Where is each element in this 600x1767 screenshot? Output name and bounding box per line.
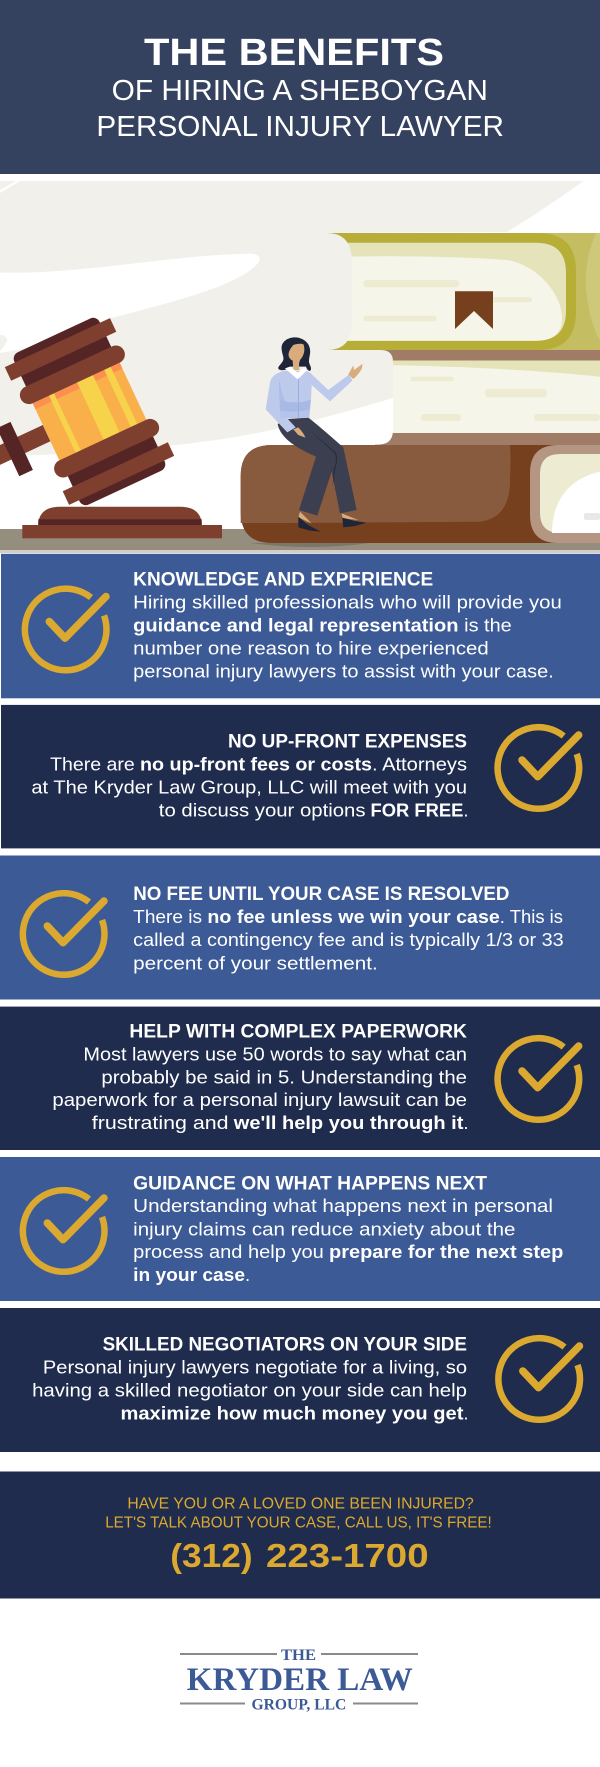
icon: bottom book (241, 445, 600, 547)
body text: personal injury lawyers to assist with your case. (133, 661, 554, 682)
body text: process and help you (133, 1241, 324, 1262)
body text: Personal injury lawyers negotiate for a living, so (43, 1356, 467, 1378)
logo: The Kryder Law Group: KRYDER LAW (187, 1662, 413, 1698)
body text: . (463, 799, 469, 820)
call to action panel (0, 1472, 600, 1598)
body text: in your case (133, 1264, 245, 1285)
body text: prepare for the next step (329, 1241, 563, 1262)
panel: knowledge and experience (1, 554, 600, 698)
body text: . (463, 1112, 469, 1133)
callout text line two: LET'S TALK ABOUT YOUR CASE, CALL US, IT'S FREE! (105, 1514, 492, 1531)
icon: gavel head and handle (0, 311, 178, 547)
panel: help with complex paperwork (0, 1007, 600, 1150)
heading: GUIDANCE ON WHAT HAPPENS NEXT (133, 1173, 487, 1194)
body text: no up-front fees or costs (140, 754, 372, 774)
icon: seated woman (266, 337, 367, 532)
body text: Most lawyers use 50 words to say what can (83, 1043, 467, 1064)
body text: FOR FREE (370, 799, 463, 820)
body text: at The Kryder Law Group, LLC will meet with you (31, 776, 467, 798)
panel: guidance on what happens next (0, 1157, 600, 1301)
heading: NO UP-FRONT EXPENSES (228, 732, 467, 753)
body text (52, 1043, 469, 1133)
title: THE BENEFITS (144, 32, 444, 74)
body text: Understanding what happens next in personal (133, 1195, 553, 1216)
hero illustration (0, 181, 600, 553)
body text: maximize how much money you get (120, 1403, 463, 1424)
body text: having a skilled negotiator on your side can help (32, 1379, 467, 1400)
body text: frustrating and (92, 1112, 228, 1133)
header banner (0, 0, 600, 174)
callout text: HAVE YOU OR A LOVED ONE BEEN INJURED? (127, 1496, 474, 1512)
background swoosh (0, 181, 584, 455)
body text: There are (50, 754, 135, 774)
ground strip (0, 529, 600, 550)
icon: stacked books (325, 233, 600, 445)
heading: NO FEE UNTIL YOUR CASE IS RESOLVED (133, 884, 509, 905)
body text: paperwork for a personal injury lawsuit can be (52, 1089, 467, 1110)
phone number: 223-1700 (266, 1537, 429, 1574)
heading: KNOWLEDGE AND EXPERIENCE (133, 570, 433, 590)
body text (133, 591, 562, 682)
body text: no fee unless we win your case (207, 906, 500, 927)
body text: Hiring skilled professionals who will provide you (133, 591, 562, 612)
icon: gavel sound block (22, 507, 222, 538)
panel: no fee until your case is resolved (0, 856, 600, 1000)
subtitle line two: PERSONAL INJURY LAWYER (96, 111, 504, 143)
body text: There is (133, 906, 202, 927)
body text: called a contingency fee and is typically 1/3 or 33 (133, 929, 564, 950)
icon: gold check circle (25, 589, 106, 670)
body text: percent of your settlement. (133, 952, 378, 973)
body text: . Attorneys (372, 754, 467, 774)
icon: gold check circle (498, 727, 579, 809)
body text (133, 906, 564, 973)
subtitle line one: OF HIRING A SHEBOYGAN (112, 75, 488, 107)
body text: number one reason to hire experienced (133, 638, 489, 659)
body text: to discuss your options (159, 799, 366, 820)
logo: The Kryder Law Group: GROUP, LLC (252, 1697, 346, 1714)
body text: guidance and legal representation (133, 614, 458, 635)
body text: we'll help you through it (233, 1112, 463, 1133)
body text (31, 754, 469, 820)
logo: The Kryder Law Group: THE (281, 1647, 316, 1664)
body text: injury claims can reduce anxiety about the (133, 1218, 515, 1239)
logo: The Kryder Law Group (180, 1647, 418, 1714)
panel: no up-front expenses (1, 705, 600, 848)
heading: HELP WITH COMPLEX PAPERWORK (129, 1021, 467, 1042)
body text: . (245, 1264, 250, 1285)
icon: gold check circle (498, 1038, 579, 1120)
body text: . This is (500, 906, 563, 927)
body text: probably be said in 5. Understanding the (101, 1066, 467, 1087)
icon: bookmark (455, 291, 493, 329)
icon: gold check circle (498, 1338, 580, 1420)
icon: gold check circle (23, 1190, 104, 1272)
panel: skilled negotiators on your side (0, 1308, 600, 1452)
body text (133, 1195, 563, 1285)
phone number: (312) (170, 1537, 253, 1574)
heading: SKILLED NEGOTIATORS ON YOUR SIDE (103, 1334, 467, 1355)
body text (32, 1356, 469, 1424)
body text: . (463, 1403, 469, 1424)
icon: gold check circle (23, 893, 104, 975)
body text: is the (464, 614, 512, 635)
